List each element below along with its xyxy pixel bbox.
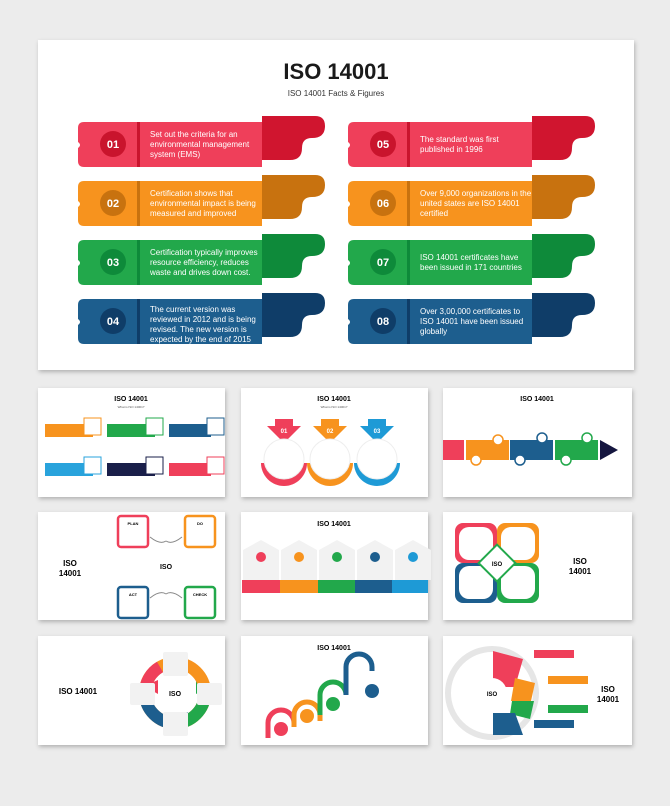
thumbnail 1: boxes [38, 388, 225, 497]
banner 01 [78, 116, 325, 167]
banner 01: Set out the criteria for an [150, 130, 238, 139]
banner 02: 02 [107, 198, 119, 210]
banner 02: environmental impact is being [150, 199, 256, 208]
thumbnail 7: circle PDCA: ISO [169, 691, 182, 698]
banner 06: certified [420, 209, 448, 218]
thumbnail 6: PDCA diamond [443, 512, 632, 620]
thumbnail 2: arrows and arcs: ISO 14001 [317, 396, 351, 403]
banner 08: 08 [377, 316, 389, 328]
thumbnail 2: arrows and arcs: What is ISO 14001? [321, 405, 348, 409]
banner 05: published in 1996 [420, 145, 483, 154]
banner 04: The current version was [150, 305, 235, 314]
banner 06 [348, 175, 595, 226]
panel: main slide [38, 40, 634, 370]
thumbnail 7: circle PDCA: ISO 14001 [59, 687, 98, 696]
banner 04 [78, 293, 325, 344]
thumbnail 4: PDCA boxes: CHECK [193, 592, 207, 597]
banner 04: revised. The new version is [150, 325, 247, 334]
banner 02: measured and improved [150, 209, 236, 218]
banner 05: The standard was first [420, 135, 499, 144]
banner 04: 04 [107, 316, 120, 328]
banner 08: ISO 14001 have been issued [420, 317, 523, 326]
thumbnail 9: fan PDCA [443, 636, 632, 745]
banner 08 [348, 293, 595, 344]
banner 03: 03 [107, 257, 119, 269]
thumbnail 2: arrows and arcs: 03 [374, 429, 381, 435]
thumbnail 4: PDCA boxes: PLAN [128, 521, 139, 526]
banner 07 [348, 234, 595, 285]
thumbnail 3: arrow timeline [443, 388, 632, 497]
thumbnail 4: PDCA boxes: 14001 [59, 569, 82, 578]
banner 08: Over 3,00,000 certificates to [420, 307, 521, 316]
thumbnail 5: pentagon row: ISO 14001 [317, 521, 351, 528]
thumbnail 4: PDCA boxes: ISO [160, 564, 173, 571]
thumbnail 6: PDCA diamond: 14001 [569, 567, 592, 576]
banner 08: globally [420, 327, 447, 336]
banner 06: united states are ISO 14001 [420, 199, 520, 208]
banner 03: waste and drives down cost. [149, 268, 250, 277]
thumbnail 2: arrows and arcs [241, 388, 428, 497]
thumbnail 9: fan PDCA: ISO [487, 692, 497, 698]
banner 06: 06 [377, 198, 389, 210]
banner 02: Certification shows that [150, 189, 233, 198]
thumbnail 6: PDCA diamond: ISO [573, 557, 587, 566]
banner 01: environmental management [150, 140, 250, 149]
banner 03 [78, 234, 325, 285]
subtitle: ISO 14001 Facts & Figures [288, 89, 384, 98]
thumbnail 2: arrows and arcs: 02 [327, 429, 334, 435]
banner 04: expected by the end of 2015 [150, 335, 252, 344]
thumbnail 8: wavy steps [241, 636, 428, 745]
banner 03: Certification typically improves [150, 248, 258, 257]
thumbnail 1: boxes: ISO 14001 [114, 396, 148, 403]
banner 07: ISO 14001 certificates have [420, 253, 519, 262]
banner 07: 07 [377, 257, 389, 269]
banner 04: reviewed in 2012 and is being [150, 315, 256, 324]
title: ISO 14001 [283, 59, 389, 84]
thumbnail 9: fan PDCA: ISO [601, 685, 615, 694]
banner 01: 01 [107, 139, 119, 151]
banner 02 [78, 175, 325, 226]
thumbnail 6: PDCA diamond: ISO [492, 562, 502, 568]
thumbnail 4: PDCA boxes [38, 512, 225, 620]
banner 05: 05 [377, 139, 389, 151]
thumbnail 4: PDCA boxes: ACT [129, 592, 138, 597]
banner 03: resource efficiency, reduces [150, 258, 249, 267]
thumbnail 2: arrows and arcs: 01 [281, 429, 288, 435]
banner 06: Over 9,000 organizations in the [420, 189, 532, 198]
thumbnail 5: pentagon row [241, 512, 431, 620]
thumbnail 3: arrow timeline: ISO 14001 [520, 396, 554, 403]
thumbnail 1: boxes: What is ISO 14001? [118, 405, 145, 409]
banner 05 [348, 116, 595, 167]
thumbnail 4: PDCA boxes: DO [197, 521, 203, 526]
banner 01: system (EMS) [150, 150, 201, 159]
thumbnail 4: PDCA boxes: ISO [63, 559, 77, 568]
banner 07: been issued in 171 countries [420, 263, 522, 272]
thumbnail 9: fan PDCA: 14001 [597, 695, 620, 704]
thumbnail 7: circle PDCA [38, 636, 225, 745]
thumbnail 8: wavy steps: ISO 14001 [317, 645, 351, 652]
